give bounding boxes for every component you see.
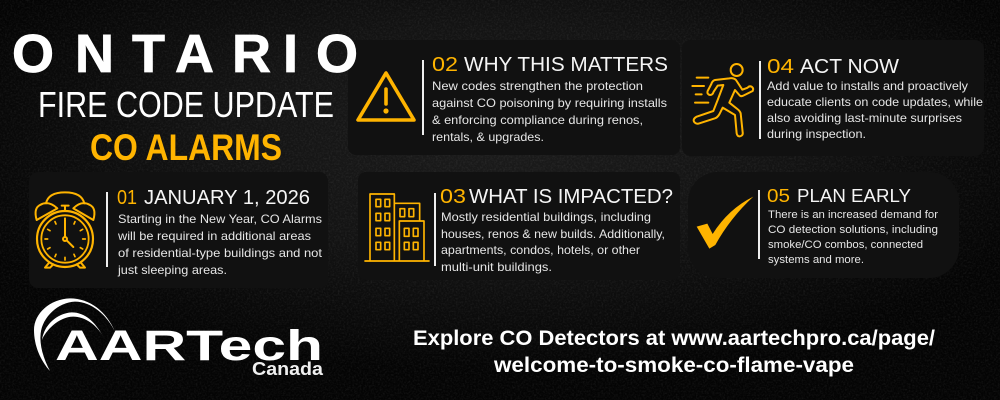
text: why this matters body [432, 80, 667, 144]
text: plan early body: smoke/CO combos, connected [768, 239, 923, 251]
call to action [413, 327, 935, 377]
text: act now body: during inspection. [767, 128, 866, 141]
icon: alarm clock [36, 192, 94, 268]
icon: running person [692, 64, 753, 136]
panel: 05 plan early [688, 172, 959, 278]
text: why this matters body: against CO poisoning by requiring installs [432, 97, 667, 110]
text: what is impacted body: multi-unit buildings. [441, 261, 552, 274]
icon: warning triangle [358, 73, 414, 120]
heading: 01: 01 [117, 187, 137, 209]
heading: what is impacted: WHAT IS IMPACTED? [469, 186, 673, 208]
text: january body: of residential-type buildings and not [118, 247, 323, 260]
text: what is impacted body: Mostly residential buildings, including [441, 211, 651, 224]
heading: january 1, 2026: JANUARY 1, 2026 [144, 187, 310, 209]
panel: 01 january 1, 2026 [29, 172, 328, 288]
text: january body [117, 213, 323, 277]
text: what is impacted body: apartments, condos, hotels, or other [441, 244, 640, 257]
text: plan early body: CO detection solutions, including [768, 224, 938, 236]
call to action: welcome-to-smoke-co-flame-vape [493, 354, 854, 377]
text: january body: just sleeping areas. [117, 264, 227, 277]
text: january body: will be required in additional areas [117, 230, 311, 243]
text: what is impacted body [441, 211, 665, 274]
heading: act now: ACT NOW [800, 56, 899, 78]
logo wordmark: AARTech [55, 322, 323, 370]
text: what is impacted body: houses, renos & new builds. Additionally, [441, 228, 665, 241]
text: act now body: Add value to installs and proactively [767, 80, 968, 93]
text: act now body: also avoiding last-minute surprises [767, 112, 962, 125]
logo arcs [34, 298, 115, 371]
text: act now body: educate clients on code updates, while [767, 96, 983, 109]
heading: 05: 05 [767, 185, 790, 206]
title block [12, 24, 358, 168]
panel: 04 act now [682, 40, 984, 156]
subtitle: Fire Code Update: FIRE CODE UPDATE [38, 84, 334, 125]
logo subtext: Canada [252, 359, 324, 379]
heading: 02: 02 [432, 54, 458, 76]
heading: 04: 04 [767, 56, 794, 78]
title: Ontario: ONTARIO [12, 24, 358, 84]
text: why this matters body: rentals, & upgrades. [432, 131, 544, 144]
heading: 03: 03 [440, 186, 466, 208]
panel: 02 why this matters [348, 40, 680, 155]
text: why this matters body: & enforcing compliance during renos, [432, 114, 643, 127]
heading: why this matters: WHY THIS MATTERS [464, 54, 668, 76]
text: why this matters body: New codes strengthen the protection [432, 80, 643, 93]
text: plan early body [768, 209, 938, 266]
subtitle: CO Alarms: CO ALARMS [90, 127, 282, 168]
call to action: Explore CO Detectors at www.aartechpro.ca/page/ [413, 327, 935, 350]
icon: check mark [697, 197, 753, 249]
logo: AARTech Canada [34, 298, 324, 379]
text: january body: Starting in the New Year, CO Alarms [118, 213, 322, 226]
heading: plan early: PLAN EARLY [797, 185, 911, 206]
text: plan early body: There is an increased demand for [768, 209, 938, 221]
icon: buildings [365, 194, 429, 261]
panel: 03 what is impacted [358, 172, 680, 280]
text: plan early body: systems and more. [768, 254, 864, 266]
text: act now body [767, 80, 983, 141]
